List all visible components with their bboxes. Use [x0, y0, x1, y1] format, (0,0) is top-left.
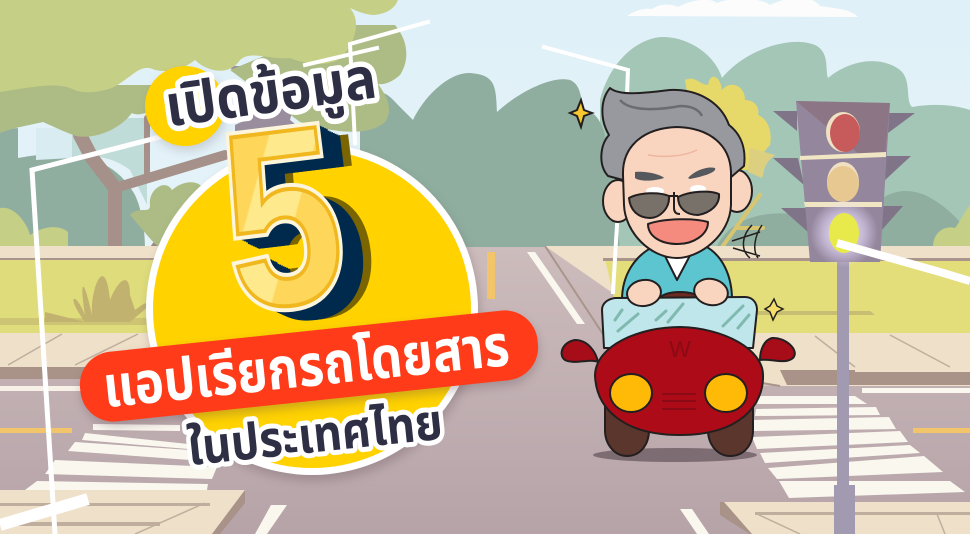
pale back trees: [36, 118, 147, 205]
car body: [595, 327, 763, 435]
number 5: 5: [227, 82, 374, 372]
number 5: 5: [216, 76, 363, 367]
red ribbon: [77, 307, 542, 430]
bottom right sidewalk: [720, 502, 970, 534]
hair: [601, 88, 744, 180]
traffic light housing: [796, 101, 890, 262]
face: [623, 127, 731, 258]
number 5: 5: [222, 79, 369, 370]
big yellow circle badge: [146, 143, 480, 481]
number 5: 5: [220, 77, 367, 368]
yellow tree behind character: [685, 77, 775, 178]
right ear: [722, 170, 752, 212]
left crosswalk: [25, 424, 217, 490]
bush left: [0, 208, 68, 247]
shirt and lapels: [660, 246, 695, 280]
ribbon text แอปเรียกรถโดยสาร: แอปเรียกรถโดยสาร: [100, 313, 512, 420]
number 5: 5: [240, 83, 387, 374]
sparkle top: [570, 100, 592, 127]
jacket: [622, 246, 732, 300]
number 5: 5: [232, 84, 379, 375]
number 5: 5: [218, 77, 365, 367]
grille: [662, 394, 696, 409]
background hills dark: [0, 73, 970, 250]
small yellow circle: [145, 66, 227, 151]
right road markings: [255, 252, 970, 534]
character man driving: [601, 88, 752, 300]
wheels: [605, 400, 649, 456]
right mirror: [760, 338, 795, 361]
windshield streaks: [615, 304, 749, 331]
hair strand: [620, 100, 702, 116]
car shadow: [593, 448, 757, 462]
eyes: [646, 185, 706, 195]
background hills right: [600, 37, 970, 250]
red lamp: [826, 112, 860, 152]
left upper sidewalk and grass: [0, 246, 170, 391]
traffic light wings: [773, 111, 915, 232]
road: [0, 247, 970, 534]
number 5: 5: [214, 75, 362, 366]
traffic light dividers: [800, 152, 886, 207]
number 5: 5: [223, 80, 370, 371]
sunglasses: [629, 192, 719, 218]
left tree canopy back: [0, 25, 406, 137]
amber lamp: [827, 162, 859, 202]
grass plant: [45, 276, 150, 322]
right hand: [692, 276, 730, 308]
windshield: [602, 297, 757, 348]
yellow lamp lit: [810, 199, 878, 267]
subtitle ในประเทศไทย: ในประเทศไทย: [185, 394, 445, 476]
left headlight: [610, 374, 652, 412]
left tree canopy front: [0, 0, 398, 92]
number 5: 5: [213, 74, 360, 365]
scribble dizzy mark: [732, 225, 762, 258]
open mouth: [648, 219, 708, 244]
W logo: W: [669, 336, 691, 362]
car: [562, 276, 795, 462]
forehead wrinkle: [648, 150, 697, 156]
number 5: 5: [236, 83, 383, 374]
faded traffic light behind headline: [228, 66, 312, 145]
headline เปิดข้อมูล: เปิดข้อมูล: [161, 46, 381, 142]
cloud: [627, 0, 858, 17]
sparkle bottom: [765, 299, 783, 320]
branch behind character: [720, 195, 763, 250]
number 5: 5: [209, 73, 356, 363]
traffic light: [773, 101, 915, 534]
left hand: [625, 278, 663, 308]
left ear: [603, 180, 633, 222]
left tree trunk: [80, 118, 225, 310]
bush centre: [130, 182, 215, 248]
yellow lane marks: [0, 252, 970, 433]
traffic light pole: [834, 260, 855, 534]
bush right: [933, 205, 970, 247]
right headlight: [705, 374, 747, 412]
right upper sidewalk and grass: [545, 246, 970, 386]
number 5: 5: [225, 81, 372, 371]
bottom left sidewalk: [0, 490, 245, 534]
left mirror: [562, 340, 598, 362]
number 5: 5: [230, 83, 377, 374]
number 5: 5: [229, 82, 376, 373]
number 5: 5: [209, 73, 356, 363]
steering wheel: [660, 292, 700, 298]
eyebrows: [635, 167, 715, 181]
